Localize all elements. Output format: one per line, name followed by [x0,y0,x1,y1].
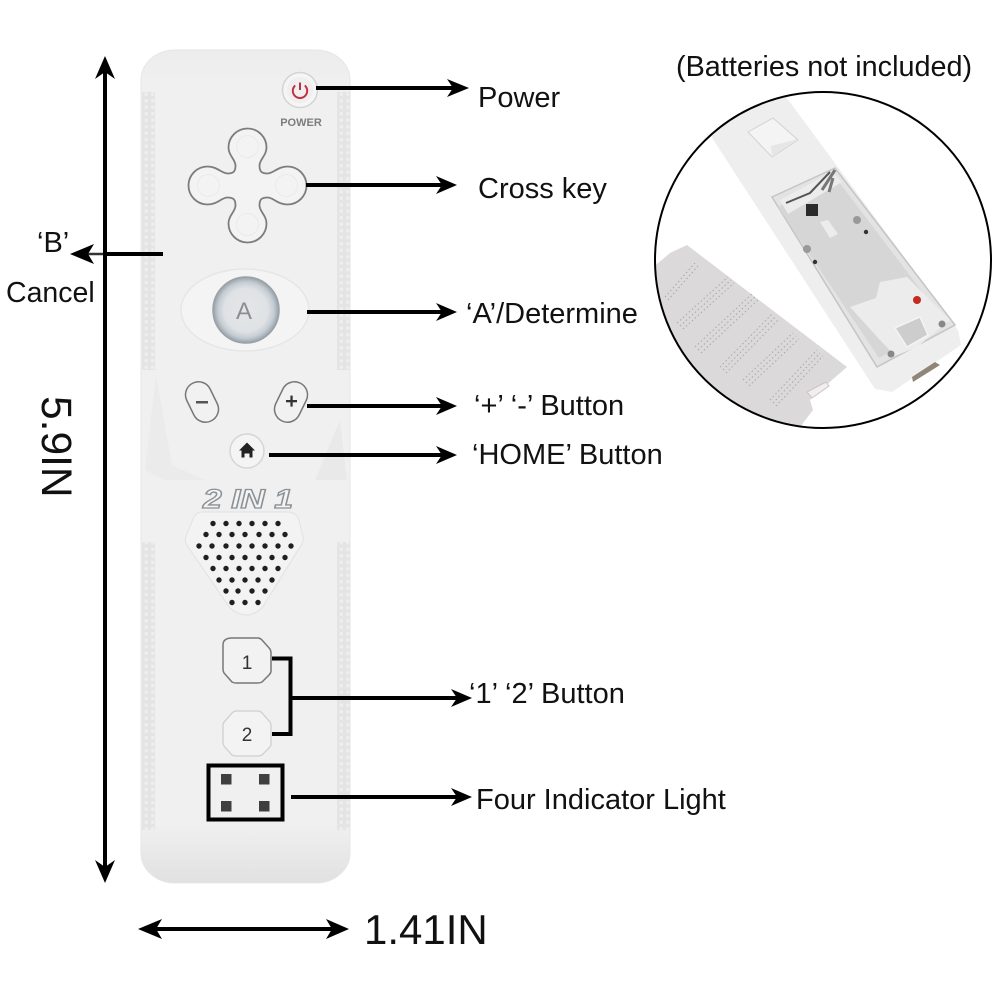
four indicator lights [208,766,282,820]
label: B: ‘B’ [37,227,69,259]
arrow: indicator lights [291,788,472,806]
button 1 [223,638,271,683]
bracket arrow: 1 2 buttons [272,658,472,734]
arrow: power [316,79,469,97]
speaker grille [185,512,303,615]
arrow: plus minus [307,397,457,415]
plus button [270,377,312,427]
label: plus minus button: ‘+’ ‘-’ Button [474,390,624,422]
battery cover [656,245,847,426]
arrow: B button [70,244,163,264]
label: four indicator light: Four Indicator Light [476,784,726,816]
A button [181,269,309,351]
width arrow [138,919,349,939]
arrow: cross key [306,176,457,194]
width label: 1.41IN [364,906,488,953]
label: cancel: Cancel [6,277,95,309]
battery compartment inset [640,90,991,440]
power button: POWER [280,117,322,129]
2 IN 1 logo: 2 IN 1 [202,484,293,514]
label: cross key: Cross key [478,173,607,205]
home button [230,434,264,468]
arrow: home [269,446,457,464]
cross key [188,128,306,242]
A button: A [236,298,252,325]
button 2: 2 [242,725,252,746]
remote back [711,98,961,392]
minus button [181,377,223,427]
label: power: Power [478,82,561,114]
batteries note: (Batteries not included) [676,51,972,83]
arrow: A button [307,303,457,321]
label: 1 2 button: ‘1’ ‘2’ Button [469,678,625,710]
label: A determine: ‘A’/Determine [466,298,638,330]
remote control body [141,50,350,883]
button 1: 1 [242,653,252,674]
button 2 [223,711,271,756]
label: home button: ‘HOME’ Button [472,439,663,471]
height arrow [95,56,115,883]
height label: 5.9IN [32,396,79,498]
power button [280,72,322,129]
